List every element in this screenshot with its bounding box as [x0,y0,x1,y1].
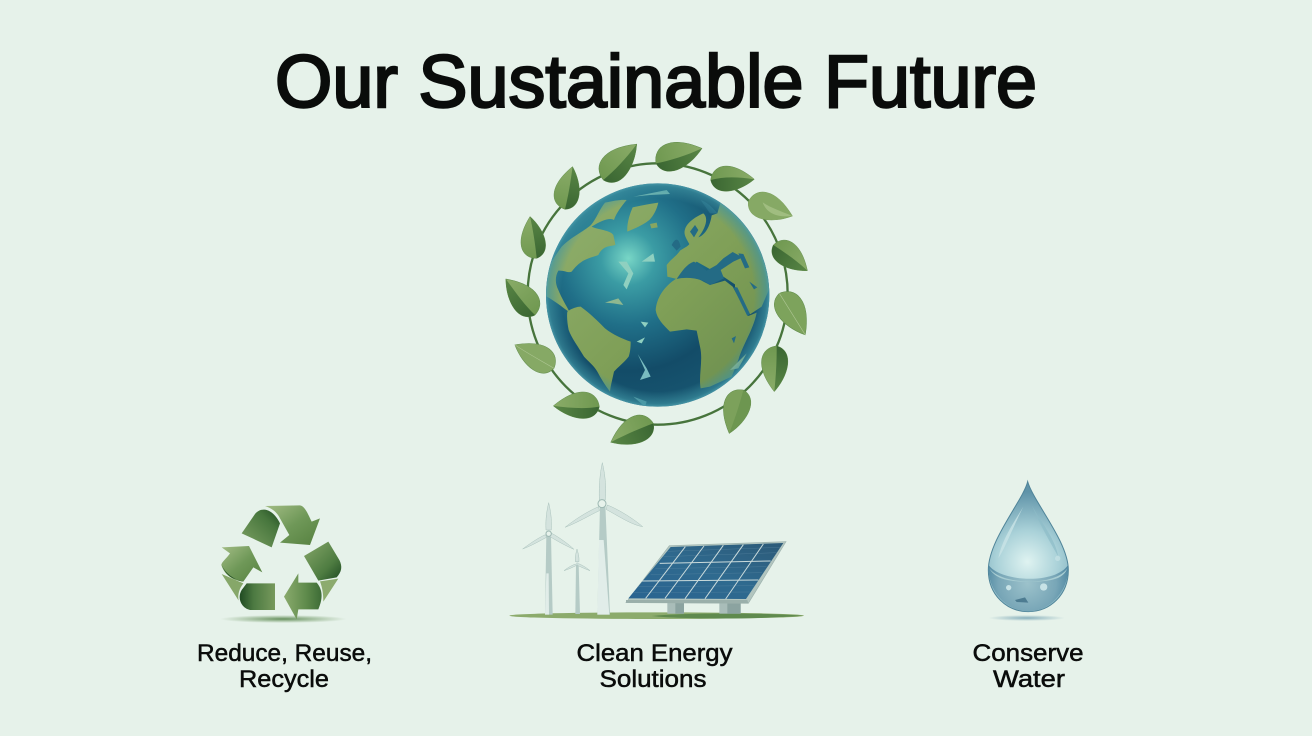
label: clean energy solutions: Solutions [600,666,706,693]
label: reduce reuse recycle [197,640,372,693]
globe [543,183,780,407]
vine ring [528,163,788,425]
globe with leaf wreath [506,142,808,445]
wind turbines [523,463,643,615]
icon: wind turbines and solar panel [509,463,804,619]
solar panel [626,542,786,614]
label: clean energy solutions: Clean Energy [576,640,732,667]
label: conserve water [972,640,1084,693]
label: reduce reuse recycle: Recycle [239,666,329,693]
title: Our Sustainable Future [275,40,1037,123]
continents [543,198,780,392]
ground [509,612,804,619]
icon: water drop [988,482,1068,621]
leaves [496,134,818,454]
label: reduce reuse recycle: Reduce, Reuse, [197,640,372,667]
label: conserve water: Water [993,666,1065,693]
label: clean energy solutions [576,640,732,693]
islands [605,190,747,407]
icon: recycle symbol [220,505,347,623]
label: conserve water: Conserve [972,640,1084,667]
inland seas [672,200,757,343]
